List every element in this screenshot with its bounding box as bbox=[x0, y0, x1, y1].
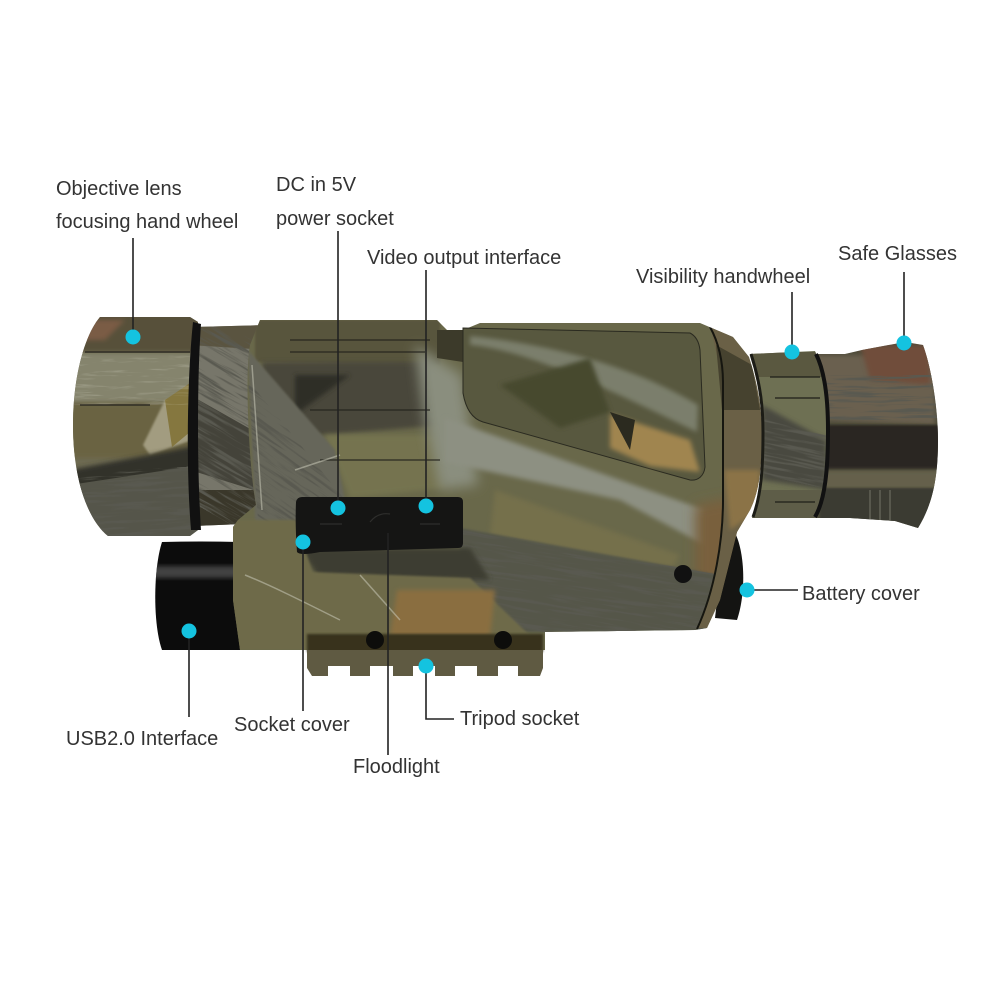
callout: Socket cover: Socket cover bbox=[234, 714, 350, 736]
callout: Video output interface: Video output interface bbox=[367, 247, 561, 269]
callout: Video output interface bbox=[367, 247, 561, 514]
callout: Objective lens focusing hand wheel: Objective lens bbox=[56, 178, 182, 200]
side screw bbox=[674, 565, 692, 583]
device: camouflage night vision monocular bbox=[59, 315, 940, 676]
flashlight tube bbox=[155, 542, 240, 650]
callout: DC in 5V power socket: power socket bbox=[276, 208, 394, 230]
callout: Safe Glasses: Safe Glasses bbox=[838, 243, 957, 265]
tripod rail bbox=[307, 631, 543, 676]
display window panel bbox=[463, 328, 705, 480]
eyepiece eyecup bbox=[810, 340, 940, 530]
callout: USB2.0 Interface: USB2.0 Interface bbox=[66, 728, 218, 750]
callout: Floodlight: Floodlight bbox=[353, 756, 440, 778]
right body band bbox=[697, 325, 762, 628]
callout: Visibility handwheel bbox=[636, 266, 810, 360]
callout: Socket cover bbox=[234, 534, 350, 736]
callout: DC in 5V power socket bbox=[276, 174, 394, 516]
callout: Battery cover: Battery cover bbox=[802, 583, 920, 605]
callout: Safe Glasses bbox=[838, 243, 957, 350]
visibility handwheel ring bbox=[750, 351, 826, 518]
callout: DC in 5V power socket: DC in 5V bbox=[276, 174, 357, 196]
objective black ring bbox=[188, 322, 201, 530]
callout: Objective lens focusing hand wheel: focusing hand wheel bbox=[56, 211, 238, 233]
socket cover bbox=[296, 497, 463, 554]
infographic canvas bbox=[56, 176, 956, 777]
callout: Visibility handwheel: Visibility handwheel bbox=[636, 266, 810, 288]
callout: Tripod socket: Tripod socket bbox=[460, 708, 580, 730]
objective focusing wheel bbox=[73, 317, 198, 536]
battery cover bbox=[715, 533, 743, 620]
callout: Tripod socket bbox=[418, 658, 580, 730]
main body bbox=[233, 320, 762, 650]
callout: Objective lens focusing hand wheel bbox=[56, 178, 238, 344]
callout: USB2.0 Interface bbox=[66, 624, 218, 750]
objective barrel bbox=[198, 325, 258, 526]
callout: Battery cover bbox=[740, 582, 920, 605]
